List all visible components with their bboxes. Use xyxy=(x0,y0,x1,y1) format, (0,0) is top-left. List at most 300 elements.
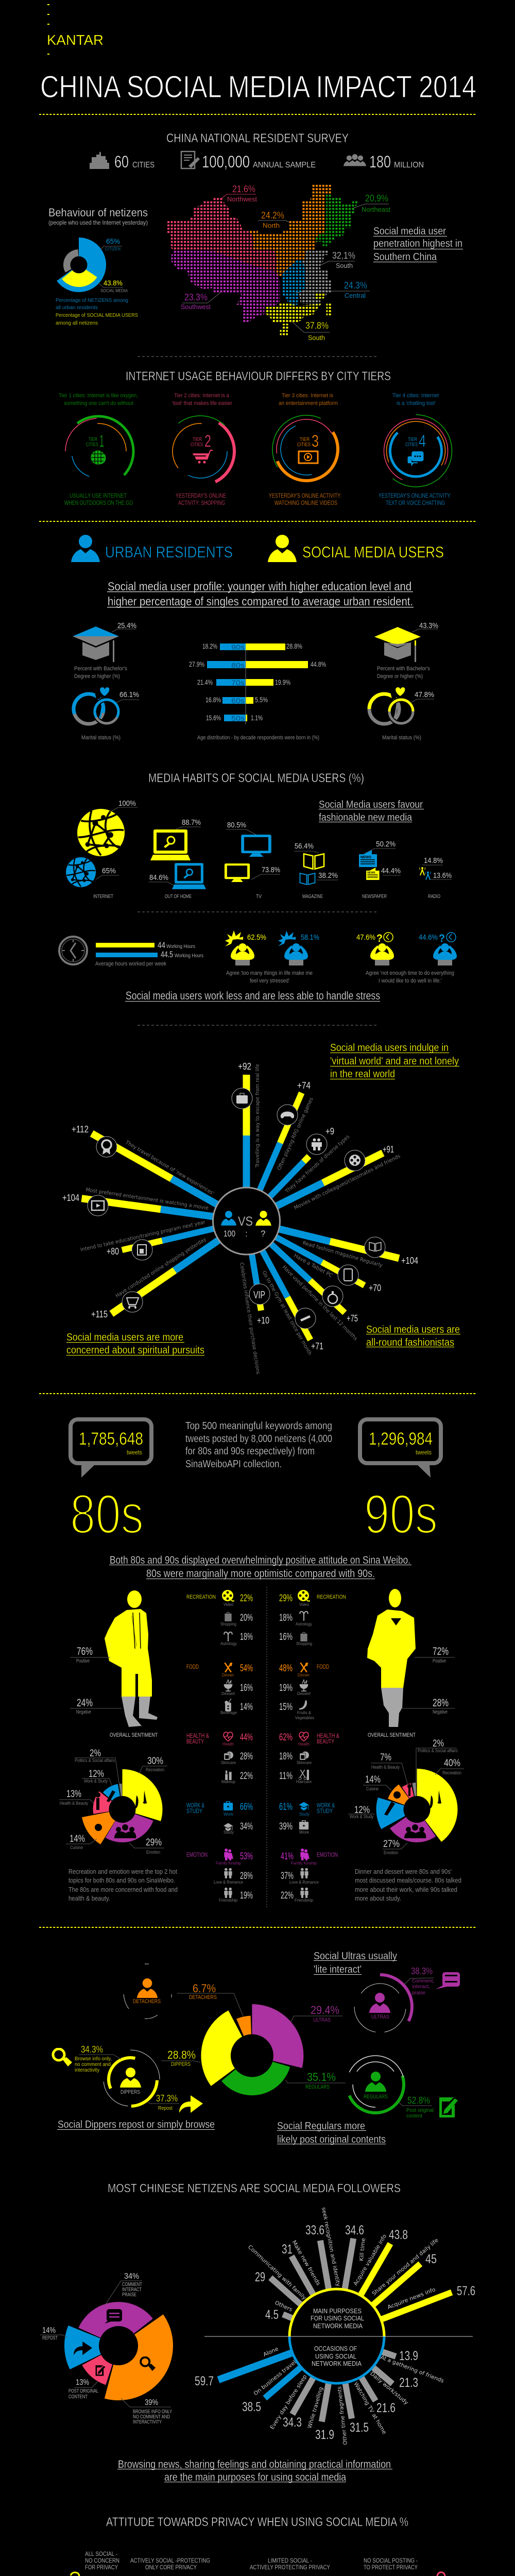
panel: detachers: DETACHERS xyxy=(189,1994,217,2001)
panel: behaviour of netizens: all urban residents xyxy=(56,304,98,311)
pie chart: 80s topics: The 80s are more concerned with food and xyxy=(68,1886,178,1893)
pie chart: behaviours xyxy=(40,2272,172,2425)
radial chart: purposes and occasions: MAIN PURPOSES xyxy=(313,2307,362,2315)
media habits chart: 38.2% xyxy=(318,871,338,880)
row: food: 48% xyxy=(279,1663,293,1674)
row: food: Beverage xyxy=(220,1710,237,1715)
callout: virtual world: 'virtual world' and are not lonely xyxy=(330,1056,459,1067)
map labels: 23.3% xyxy=(184,292,208,302)
bar captions: Celebrities influence their purchase decisions xyxy=(238,1262,261,1375)
panel: tier 3: an entertainment platform xyxy=(279,400,338,406)
row: emotion: EMOTION xyxy=(317,1851,338,1858)
pie chart: 80s topics: 2% xyxy=(90,1748,101,1759)
row: emotion: 37% xyxy=(281,1871,294,1882)
survey stats xyxy=(90,151,424,171)
radial chart: purposes and occasions: 31.5 xyxy=(350,2420,369,2435)
panel: ultras: interact, xyxy=(412,1984,430,1990)
bar captions: Movies with colleagues/classmates and friends xyxy=(293,1154,401,1211)
pie chart: behaviours: COMMENT xyxy=(122,2282,142,2287)
bar captions: Have a Tablet PC xyxy=(293,1253,333,1279)
panel: detachers xyxy=(124,1964,243,2019)
panel: dippers: 34.3% xyxy=(81,2044,103,2055)
panel: tier 2: TIER xyxy=(193,437,202,443)
callout: new media xyxy=(319,799,424,823)
heading: urban residents vs social media users xyxy=(71,535,444,562)
bar values: +9 xyxy=(325,1126,334,1137)
statement: browsing news: are the main purposes for using social media xyxy=(164,2471,346,2483)
statement: attitude xyxy=(109,1554,411,1580)
row: work and study: 61% xyxy=(279,1802,293,1812)
panel: stress figures xyxy=(225,930,457,984)
map labels: South xyxy=(336,262,353,269)
rings: marital status urban xyxy=(70,687,139,728)
panel: ultras: 38.3% xyxy=(411,1966,433,1976)
radial chart: purposes and occasions: USING SOCIAL xyxy=(315,2352,356,2360)
bar chart: age distribution: Age distribution - by decade respondents were born in (%) xyxy=(197,735,319,741)
survey stats: MILLION xyxy=(394,161,424,170)
row: food: FOOD xyxy=(317,1663,329,1670)
figure: 80s man sentiment: Positive xyxy=(76,1658,90,1664)
icon: newspapers xyxy=(359,850,377,867)
row: recreation: Video xyxy=(299,1602,309,1607)
row: health and beauty: Skincare xyxy=(297,1760,312,1765)
section: survey heading: CHINA NATIONAL RESIDENT SURVEY xyxy=(166,131,349,145)
icon: magazines xyxy=(304,854,324,869)
statement: attitude: 80s were marginally more optimistic compared with 90s. xyxy=(146,1568,375,1580)
row: health and beauty: HEALTH & xyxy=(186,1732,209,1739)
pie chart: behaviours: BROWSE INFO ONLY xyxy=(133,2409,172,2415)
panel: tier 4: TEXT OR VOICE CHATTING xyxy=(386,500,445,506)
pie chart: 90s topics: Work & Study xyxy=(350,1814,373,1819)
pie chart: behaviours: POST ORIGINAL xyxy=(68,2388,98,2394)
bar values: +10 xyxy=(257,1315,269,1326)
statement: work less: Social media users work less and are less able to handle stress xyxy=(126,989,380,1002)
row: work and study: Study xyxy=(224,1829,234,1835)
row: health and beauty: Health xyxy=(298,1741,310,1747)
row: recreation: Shopping xyxy=(220,1621,236,1626)
row: health and beauty: Health xyxy=(222,1741,234,1747)
radial chart: purposes and occasions: Communicating with family xyxy=(247,2244,307,2301)
row: emotion: EMOTION xyxy=(186,1851,208,1858)
row: recreation: 18% xyxy=(279,1613,293,1623)
heading: media habits: MEDIA HABITS OF SOCIAL MEDIA USERS (%) xyxy=(148,771,364,785)
heading: followers: MOST CHINESE NETIZENS ARE SOCIAL MEDIA FOLLOWERS xyxy=(108,2181,401,2195)
row: food: Fruits & xyxy=(297,1710,311,1715)
row: food xyxy=(186,1663,329,1720)
speech bubble: 90s tweets xyxy=(360,1419,441,1478)
icon: televisions xyxy=(241,835,271,857)
media habits chart: INTERNET xyxy=(93,894,113,900)
panel: ultras: ULTRAS xyxy=(371,2014,389,2020)
icon: survey form xyxy=(181,151,200,168)
callout: regulars xyxy=(277,2121,386,2145)
panel: tier 2: ACTIVITY: SHOPPING xyxy=(178,500,225,506)
row: health and beauty: BEAUTY xyxy=(317,1738,334,1745)
bar chart: age distribution: 19.9% xyxy=(275,678,290,686)
row: food: FOOD xyxy=(186,1663,199,1670)
pie chart: 80s topics: 30% xyxy=(147,1756,163,1767)
panel: privacy spectrum: ACTIVELY PROTECTING PRIVACY xyxy=(250,2564,330,2571)
panel: tier 2: CITIES xyxy=(191,442,203,448)
row: recreation: RECREATION xyxy=(317,1594,346,1600)
callout: spiritual pursuits: Social media users are more xyxy=(66,1332,183,1343)
bar icons xyxy=(88,1088,385,1329)
icon: radio towers xyxy=(419,867,425,875)
bar values: +92 xyxy=(238,1061,251,1072)
pie chart: 80s topics: Cuisine xyxy=(70,1845,83,1850)
bar chart: age distribution: 44.8% xyxy=(311,660,326,668)
segment labels: 28.8% xyxy=(167,2048,196,2061)
radial chart: purposes and occasions: Watching TV at home xyxy=(352,2381,387,2435)
row: work and study: Work xyxy=(299,1829,310,1835)
bar values: +112 xyxy=(72,1124,89,1134)
pie chart: behaviours: CONTENT xyxy=(68,2394,88,2400)
centre badge: VS: VS xyxy=(238,1214,253,1229)
callout: new media: Social Media users favour xyxy=(319,799,423,810)
callout: southern china: penetration highest in xyxy=(373,238,462,249)
statement: browsing news: Browsing news, sharing feelings and obtaining practical information xyxy=(118,2459,391,2470)
radial chart: purposes and occasions: 59.7 xyxy=(195,2374,214,2388)
callout: fashionistas: Social media users are xyxy=(366,1324,460,1335)
row: work and study: 34% xyxy=(240,1821,253,1832)
panel: stress figures: 47.6% xyxy=(356,933,375,942)
panel: behaviour of netizens: Percentage of SOCIAL MEDIA USERS xyxy=(56,312,138,318)
heading: urban residents vs social media users: SOCIAL MEDIA USERS xyxy=(302,543,444,561)
row: work and study: WORK & xyxy=(317,1802,335,1809)
heading: 90s: 90s xyxy=(364,1483,438,1545)
panel: tier 3 xyxy=(260,393,353,506)
heading: 80s: 80s xyxy=(70,1483,144,1545)
bar chart: age distribution: 5.5% xyxy=(255,696,268,704)
panel: behaviour of netizens: among all netizens xyxy=(56,320,98,326)
row: health and beauty: 28% xyxy=(240,1751,253,1762)
panel: stress figures: Agree 'too many things in life make me xyxy=(226,970,313,976)
callout: southern china: Southern China xyxy=(373,251,437,263)
panel: tier 4: 4 xyxy=(419,432,426,450)
radial chart: purposes and occasions: Share your mood and daily life xyxy=(371,2237,440,2297)
panel: ultras: Comment, xyxy=(412,1978,434,1984)
pie chart: behaviours: PRAISE xyxy=(122,2292,136,2298)
panel: working hours xyxy=(59,937,203,967)
panel: education social: Percent with Bachelor's xyxy=(377,666,430,672)
radial chart: purposes and occasions: seek recognition and identity xyxy=(320,2207,341,2287)
centre badge: VS xyxy=(213,1188,280,1255)
panel: education social: Degree or higher (%) xyxy=(377,673,423,680)
row: health and beauty: 18% xyxy=(279,1751,293,1762)
panel: behaviour of netizens: 65% xyxy=(106,237,120,245)
segment labels: 35.1% xyxy=(307,2071,336,2083)
map labels: 37.8% xyxy=(305,320,329,331)
pie chart: 90s topics: Health & Beauty xyxy=(371,1765,400,1770)
row: food: Dessert xyxy=(221,1691,235,1696)
bar captions: Travelling is a way to escape from real life xyxy=(255,1064,261,1168)
row: work and study: WORK & xyxy=(186,1802,204,1809)
panel: regulars: REGULARS xyxy=(364,2094,388,2100)
icon: cart xyxy=(193,450,213,464)
callout: spiritual pursuits xyxy=(66,1332,204,1356)
text: methodology: tweets posted by 8,000 netizens (4,000 xyxy=(185,1433,332,1445)
callout: lite interact: Social Ultras usually xyxy=(314,1951,397,1962)
pie chart: 80s topics: Work & Study xyxy=(84,1778,108,1784)
radial chart: purposes and occasions: 33.6 xyxy=(305,2223,324,2238)
pie chart: behaviours: 34% xyxy=(124,2272,139,2281)
media habits chart xyxy=(66,799,452,900)
pie chart: 90s topics: Cuisine xyxy=(366,1786,379,1791)
figure: 90s man sentiment: Negative xyxy=(433,1709,448,1715)
radial chart: purposes and occasions: FOR USING SOCIAL xyxy=(311,2314,364,2322)
figure: 80s man sentiment: OVERALL SENTIMENT xyxy=(110,1732,158,1738)
row: emotion: Friendship xyxy=(219,1897,237,1903)
figure: 80s man sentiment: Negative xyxy=(76,1709,91,1715)
dot map of China xyxy=(167,184,357,335)
bar captions: Have used perfume in the last 12 months xyxy=(281,1264,358,1342)
panel: privacy spectrum: FOR PRIVACY xyxy=(85,2564,118,2571)
panel: tier 3: Tier 3 cities: Internet is xyxy=(282,393,333,399)
panel: tier 3: WATCHING ONLINE VIDEOS xyxy=(274,500,337,506)
pie chart: 90s topics xyxy=(348,1738,464,1902)
bar captions xyxy=(80,1064,401,1375)
callout: dippers: Social Dippers repost or simply browse xyxy=(58,2119,215,2130)
radial chart: purposes and occasions: 31.9 xyxy=(315,2428,334,2442)
donut chart: user segments xyxy=(201,2005,303,2106)
row: work and study xyxy=(186,1802,335,1835)
radial chart: purposes and occasions: 31 xyxy=(282,2242,293,2257)
icon: open lock xyxy=(61,2572,79,2576)
speech bubble: 80s tweets: tweets xyxy=(127,1449,142,1456)
segment labels: 29.4% xyxy=(311,2004,339,2016)
row: work and study: Work xyxy=(224,1811,234,1817)
radial chart: purposes and occasions: Kill time xyxy=(358,2238,367,2261)
profile statement xyxy=(107,580,414,608)
callout: fashionistas xyxy=(366,1324,460,1348)
bar captions: They have friends of diverse types xyxy=(284,1134,351,1195)
panel: stress figures: Agree 'not enough time to do everything xyxy=(366,970,454,976)
panel: education social xyxy=(374,621,438,680)
radial chart: purposes and occasions: NETWORK MEDIA xyxy=(312,2360,362,2367)
panel: tier 1: WHEN OUTDOORS ON THE GO xyxy=(64,500,133,506)
row: work and study: STUDY xyxy=(186,1807,202,1815)
panel: stress figures: ? xyxy=(439,933,445,944)
pie chart: 90s topics: 14% xyxy=(365,1774,381,1785)
text: 66.1% xyxy=(119,690,139,699)
bar captions: Read fashion magazine Regularly xyxy=(302,1240,383,1268)
map labels: 24.2% xyxy=(261,210,284,221)
row: health and beauty: 11% xyxy=(279,1771,293,1782)
panel: regulars: content xyxy=(406,2113,422,2119)
icon: globe xyxy=(91,451,105,464)
panel: behaviour of netizens: (people who used the Internet yesterday) xyxy=(48,219,148,226)
panel: privacy spectrum: ONLY CORE PRIVACY xyxy=(145,2564,197,2571)
media habits chart: 84.6% xyxy=(149,873,168,882)
survey stats: 180 xyxy=(369,152,391,171)
row: recreation xyxy=(186,1590,346,1646)
panel: stress figures: feel very stressed' xyxy=(250,978,289,984)
media habits chart: OUT OF HOME xyxy=(165,894,192,900)
map labels: 20,9% xyxy=(365,193,388,204)
panel: working hours: 44 xyxy=(158,940,165,950)
icon: city xyxy=(90,151,109,169)
bar values: +80 xyxy=(107,1246,119,1257)
callout: southern china: Social media user xyxy=(373,226,446,237)
radial chart: index versus urban residents xyxy=(62,1061,418,1375)
panel: dippers: Repost xyxy=(158,2105,173,2111)
bar chart: age distribution: 21.4% xyxy=(197,678,213,686)
radial chart: purposes and occasions: 45 xyxy=(425,2252,437,2266)
callout: regulars: Social Regulars more xyxy=(277,2121,365,2132)
text: methodology xyxy=(185,1420,332,1470)
figure: 80s man sentiment: 76% xyxy=(77,1646,93,1657)
callout: virtual world: in the real world xyxy=(330,1069,395,1080)
segment labels: ULTRAS xyxy=(313,2017,331,2023)
bar chart: age distribution: 1.1% xyxy=(251,714,263,722)
map labels: 24.3% xyxy=(344,280,367,291)
donut chart xyxy=(58,244,100,286)
pie chart: behaviours: REPOST xyxy=(42,2335,58,2341)
panel: ultras: praise xyxy=(412,1990,425,1996)
pie chart: 80s topics: health & beauty. xyxy=(68,1894,110,1902)
pie chart: 80s topics: 29% xyxy=(146,1837,162,1848)
bar chart: age distribution xyxy=(189,642,326,741)
panel: regulars xyxy=(337,2046,458,2123)
speech bubble: 90s tweets: 1,296,984 xyxy=(369,1429,433,1449)
panel: tier 2: Tier 2 cities: Internet is a xyxy=(174,393,230,399)
panel: regulars: Post original xyxy=(406,2107,434,2113)
survey stats: 60 xyxy=(114,152,129,171)
radial chart: purposes and occasions: Acquire valuable info xyxy=(352,2233,388,2287)
radial chart: purposes and occasions: 29 xyxy=(255,2270,265,2284)
media habits chart: TV xyxy=(256,894,262,900)
text: Marital status (%) xyxy=(81,735,121,741)
segment labels: DIPPERS xyxy=(171,2061,191,2067)
row: work and study: STUDY xyxy=(317,1807,333,1815)
row: recreation: 29% xyxy=(279,1593,293,1604)
panel: tier 1: 1 xyxy=(99,432,104,450)
panel: stress figures: ? xyxy=(376,933,383,944)
pie chart: behaviours: INTERACTIVITY xyxy=(133,2419,162,2425)
panel: tier 1: Tier 1 cities: Internet is like oxygen, xyxy=(59,393,138,399)
heading: internet usage: INTERNET USAGE BEHAVIOUR DIFFERS BY CITY TIERS xyxy=(126,369,391,383)
pie chart: 80s topics: topics for both 80s and 90s on SinaWeibo. xyxy=(68,1876,175,1884)
panel: privacy spectrum: ALL SOCIAL - xyxy=(85,2550,117,2557)
row: emotion: Family Kinship xyxy=(216,1860,241,1866)
bar values: +115 xyxy=(91,1309,108,1319)
panel: behaviour of netizens xyxy=(48,206,148,326)
panel: education social: 43.3% xyxy=(419,621,438,630)
row: food: Dessert xyxy=(297,1691,311,1696)
row: food: Dinner xyxy=(222,1672,234,1677)
bar captions: Intend to take education/training program next year xyxy=(80,1219,207,1253)
pie chart: 80s topics: Recreation xyxy=(146,1767,164,1772)
row: recreation: 18% xyxy=(240,1632,253,1642)
panel: dippers: DIPPERS xyxy=(121,2089,140,2095)
row: recreation: RECREATION xyxy=(186,1594,216,1600)
panel: privacy spectrum: TO PROTECT PRIVACY xyxy=(364,2564,418,2571)
bar chart: age distribution: 27.9% xyxy=(189,660,204,668)
panel: behaviour of netizens: SOCIAL MEDIA xyxy=(100,289,128,293)
panel: privacy spectrum: LIMITED SOCIAL - xyxy=(268,2557,312,2564)
media habits chart: 56.4% xyxy=(295,842,314,851)
pie chart: 90s topics: more about their work, while 90s talked xyxy=(355,1886,457,1893)
panel: privacy spectrum: ACTIVELY SOCIAL -PROTECTING xyxy=(130,2557,210,2564)
panel: education urban: Percent with Bachelor's xyxy=(74,666,127,672)
bar values: +91 xyxy=(383,1144,394,1155)
media habits chart: 80.5% xyxy=(227,821,246,829)
panel: tier 4 xyxy=(373,393,458,506)
panel: tier 3: TIER xyxy=(300,437,310,443)
panel: tier 2: 2 xyxy=(204,432,211,450)
radial chart: purposes and occasions: 21.6 xyxy=(376,2401,396,2415)
callout: fashionistas: all-round fashionistas xyxy=(366,1337,454,1348)
row: emotion: 53% xyxy=(240,1851,253,1862)
panel: tier 4: CITIES xyxy=(405,442,418,448)
row: recreation: 16% xyxy=(279,1632,293,1642)
heading: urban residents vs social media users: URBAN RESIDENTS xyxy=(105,543,233,561)
panel: tier 3: CITIES xyxy=(297,442,311,448)
row: food: 14% xyxy=(240,1702,253,1713)
panel: tier 4: YESTERDAY'S ONLINE ACTIVITY: xyxy=(379,493,451,499)
media habits chart: 44.4% xyxy=(381,867,401,875)
panel: education urban: 25.4% xyxy=(117,621,136,630)
statement: browsing news xyxy=(117,2459,392,2483)
pie chart: 80s topics xyxy=(59,1748,178,1902)
bar captions: Often playing RPG online games xyxy=(277,1097,315,1171)
radial chart: purposes and occasions: NETWORK MEDIA xyxy=(313,2322,363,2330)
radial chart: purposes and occasions: Make new friends xyxy=(290,2239,321,2286)
icon: comment xyxy=(436,1972,460,1989)
statement: attitude: Both 80s and 90s displayed overwhelmingly positive attitude on Sina Weibo. xyxy=(110,1554,410,1566)
centre badge: VS: : xyxy=(245,1229,248,1239)
row: recreation: Shopping xyxy=(296,1641,312,1646)
icon: people xyxy=(344,154,366,166)
bar captions: They travel because of 'new experiences' xyxy=(124,1140,215,1196)
bar chart: age distribution: 16.8% xyxy=(205,696,221,704)
bar captions: Have conducted online shopping yesterday xyxy=(115,1236,208,1299)
figure: 90s man sentiment: OVERALL SENTIMENT xyxy=(368,1732,416,1738)
figure: 90s man sentiment: 28% xyxy=(433,1697,449,1709)
map labels xyxy=(181,184,390,342)
centre badge: VS: ? xyxy=(261,1229,265,1239)
panel: privacy spectrum xyxy=(47,2550,465,2576)
header logo: KANTAR xyxy=(47,32,104,48)
bar values: +71 xyxy=(311,1341,323,1351)
bar values xyxy=(62,1061,418,1351)
panel: detachers: 6.7% xyxy=(193,1982,216,1995)
icon: clock xyxy=(59,937,87,964)
row: emotion: 28% xyxy=(240,1871,253,1882)
pie chart: 90s topics: 2% xyxy=(433,1738,444,1749)
pie chart: 90s topics: Recreation xyxy=(442,1770,461,1775)
bar values: +104 xyxy=(401,1256,418,1266)
panel: tier 2 xyxy=(150,393,250,506)
panel: detachers: DETACHERS xyxy=(133,1998,161,2005)
panel: tier 3: 3 xyxy=(312,432,319,450)
row: health and beauty: Skincare xyxy=(221,1760,236,1765)
panel: tier 2: YESTERDAY'S ONLINE xyxy=(176,493,226,499)
table: topics comparison xyxy=(186,1590,346,1903)
rings: marital status social xyxy=(369,687,434,724)
row: emotion: 19% xyxy=(240,1890,253,1901)
figure: 90s man sentiment xyxy=(367,1589,455,1738)
radial chart: purposes and occasions: Alone xyxy=(262,2346,280,2358)
bar chart: age distribution: 18.2% xyxy=(202,642,217,650)
pie chart: 80s topics: 12% xyxy=(89,1769,104,1780)
row: health and beauty: Haircare xyxy=(296,1779,312,1784)
bar chart: age distribution: 28.8% xyxy=(286,642,302,650)
panel: tier 3: YESTERDAY'S ONLINE ACTIVITY: xyxy=(269,493,341,499)
radial chart: purposes and occasions: 57.6 xyxy=(457,2284,475,2298)
row: health and beauty: 62% xyxy=(279,1732,293,1743)
icon: chat xyxy=(408,451,423,466)
